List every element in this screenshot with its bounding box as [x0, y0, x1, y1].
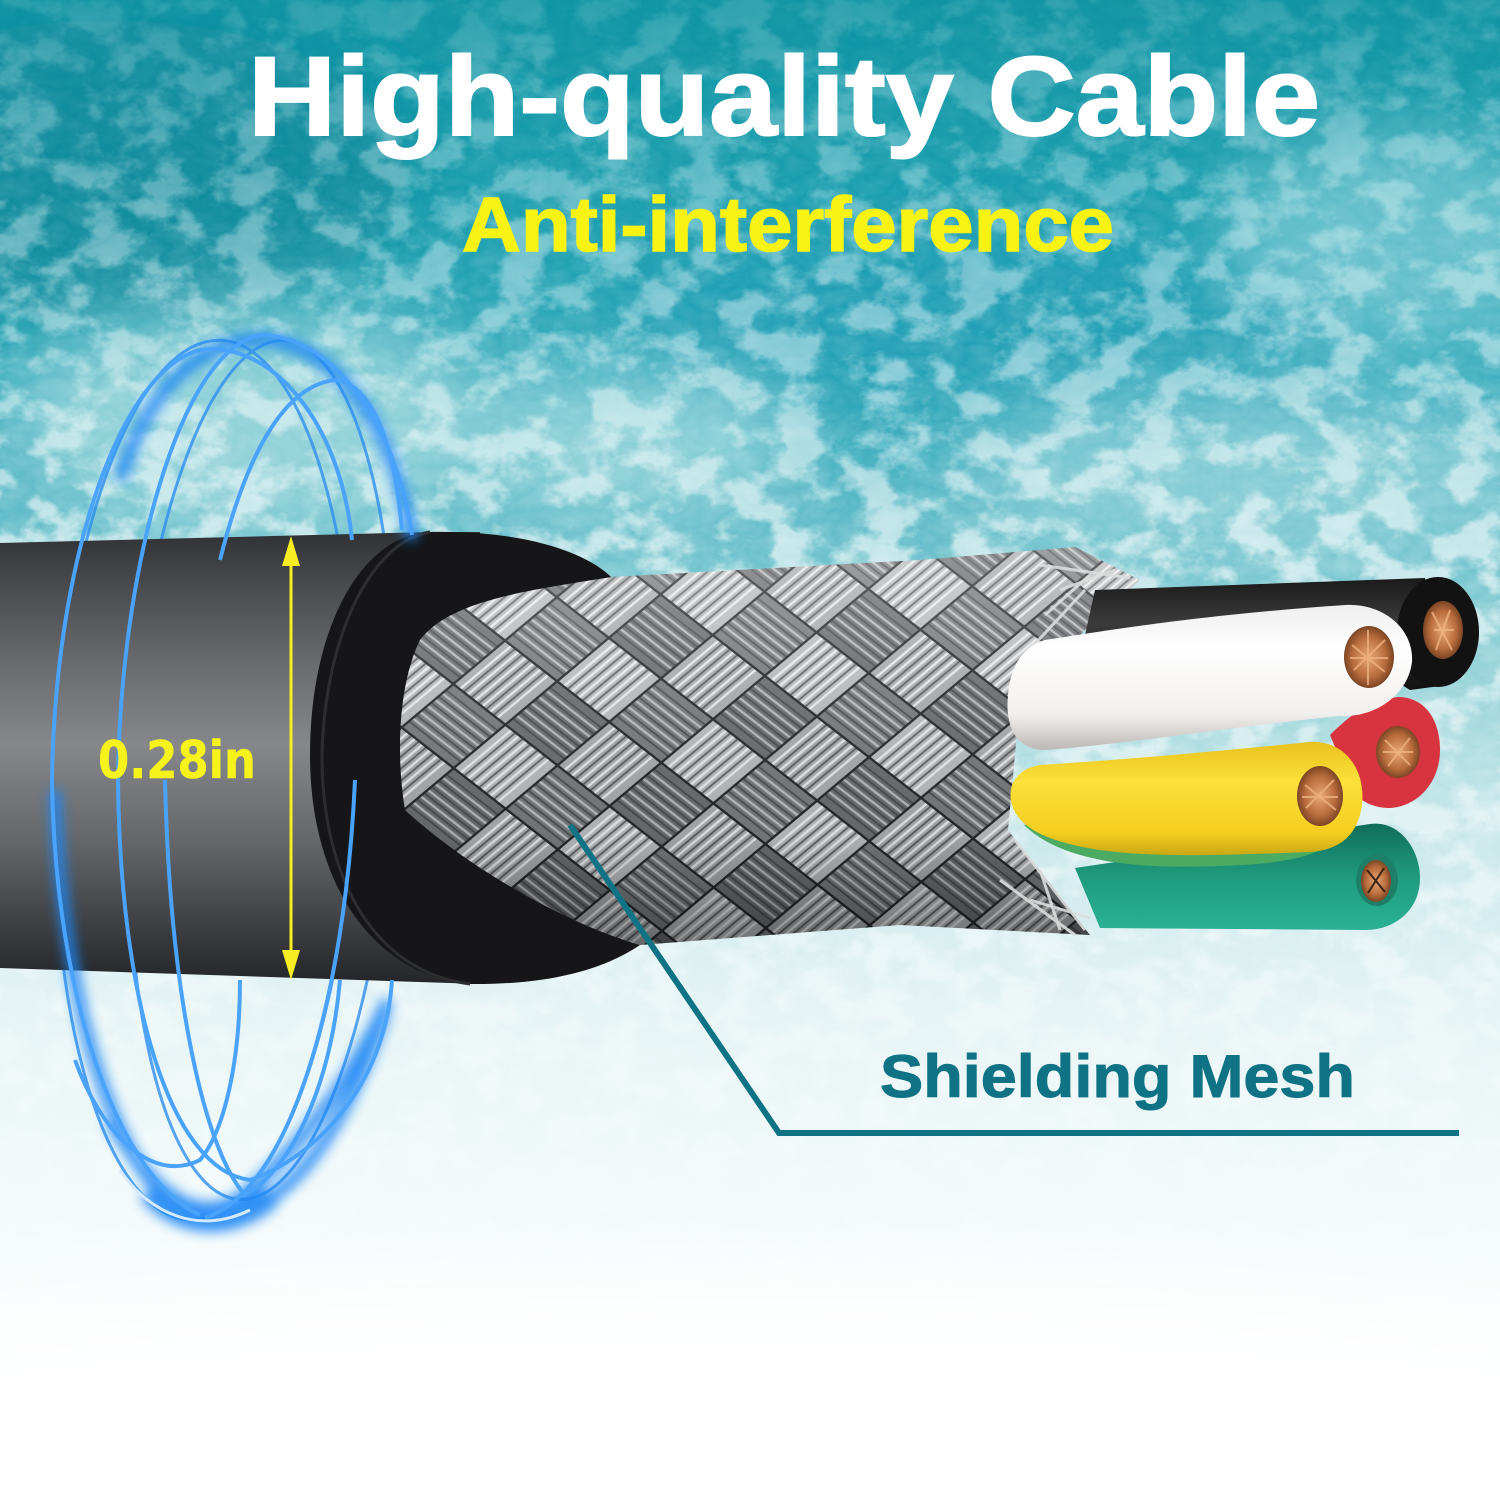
- back half of electromagnetic rings: [40, 334, 416, 1225]
- callout leader line: [570, 825, 1459, 1133]
- wire: white: [1007, 605, 1412, 750]
- callout label: Shielding Mesh: [880, 1043, 1355, 1110]
- shielding braid: [400, 547, 1140, 945]
- title: High-quality Cable: [248, 34, 1320, 159]
- diameter arrow: [282, 536, 300, 980]
- wire: yellow: [1011, 742, 1362, 867]
- cable outer jacket: [0, 532, 480, 984]
- cable end face: [310, 532, 640, 984]
- front half of electromagnetic rings: [52, 335, 412, 1222]
- wire: red: [1330, 697, 1440, 808]
- wire: green: [1075, 824, 1420, 930]
- subtitle: Anti-interference: [462, 182, 1114, 268]
- diameter label: 0.28in: [98, 731, 256, 791]
- wire: black: [1085, 577, 1479, 690]
